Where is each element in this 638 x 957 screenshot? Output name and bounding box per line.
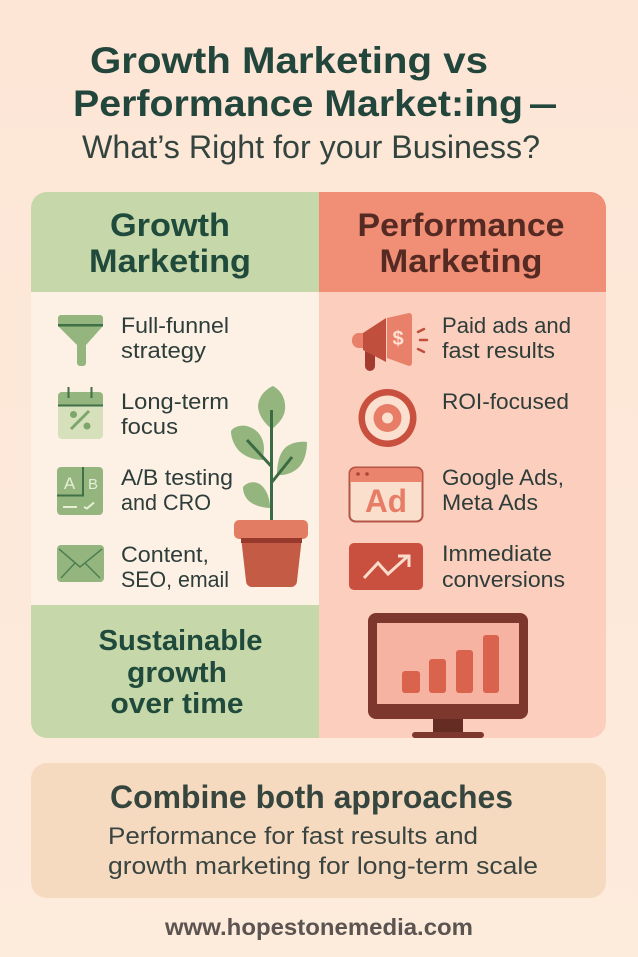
panel: combine both approaches: growth marketing for long-term scale — [108, 853, 538, 880]
icon: megaphone: $ — [392, 328, 404, 350]
item: A/B testing: A/B testing — [121, 465, 233, 490]
panel: combine both approaches: Combine both approaches — [110, 779, 513, 815]
item: content: SEO, email — [121, 567, 229, 592]
icon: calendar — [58, 387, 103, 439]
icon: A/B test: A — [64, 474, 76, 493]
title: — — [530, 83, 556, 124]
icon: monitor bar chart — [368, 613, 528, 738]
icon: funnel — [58, 315, 103, 366]
item: full-funnel: Full-funnel — [121, 313, 229, 338]
item: immediate: conversions — [442, 567, 565, 592]
item: A/B testing — [121, 465, 233, 515]
performance header: Performance — [358, 207, 564, 243]
item: long-term — [121, 389, 229, 439]
icon: target — [358, 389, 416, 447]
growth header: Marketing — [89, 243, 251, 279]
icon: megaphone — [352, 313, 427, 371]
item: immediate — [442, 541, 565, 592]
title: Growth Marketing vs — [90, 40, 488, 81]
subtitle: What’s Right for your Business? — [82, 129, 540, 165]
item: long-term: Long-term — [121, 389, 229, 414]
panel: combine both approaches: Performance for fast results and — [108, 823, 478, 850]
performance header — [319, 192, 606, 292]
icon: trending up — [349, 543, 423, 590]
icon: A/B test — [57, 467, 103, 515]
icon: ad window — [350, 468, 422, 522]
panel: combine both approaches — [31, 763, 606, 898]
icon: A/B test: B — [88, 476, 98, 493]
icon: ad window: Ad — [365, 483, 407, 519]
item: content: Content, — [121, 542, 209, 567]
item: google ads: Meta Ads — [442, 490, 538, 515]
item: paid ads: fast results — [442, 338, 555, 363]
title — [73, 40, 556, 124]
growth footer: growth — [127, 657, 227, 689]
panel: performance marketing — [319, 192, 606, 738]
website url: www.hopestonemedia.com — [164, 914, 473, 940]
item: google ads — [442, 465, 564, 515]
item: content — [121, 542, 229, 592]
item: ROI-focused: ROI-focused — [442, 389, 569, 414]
item: google ads: Google Ads, — [442, 465, 564, 490]
title: Performance Market:ing — [73, 83, 523, 124]
item: paid ads: Paid ads and — [442, 313, 571, 338]
panel: growth marketing — [31, 192, 319, 738]
icon: envelope — [57, 545, 104, 582]
performance header: Marketing — [380, 243, 542, 279]
growth footer: Sustainable — [98, 625, 262, 657]
growth header: Growth — [110, 207, 230, 243]
item: paid ads — [442, 313, 571, 363]
growth footer: over time — [110, 688, 244, 720]
item: full-funnel — [121, 313, 229, 363]
item: full-funnel: strategy — [121, 338, 206, 363]
growth header — [31, 192, 319, 292]
item: A/B testing: and CRO — [121, 490, 211, 515]
icon: potted plant — [231, 386, 308, 587]
item: long-term: focus — [121, 414, 178, 439]
growth footer — [31, 605, 319, 738]
item: immediate: Immediate — [442, 541, 552, 566]
